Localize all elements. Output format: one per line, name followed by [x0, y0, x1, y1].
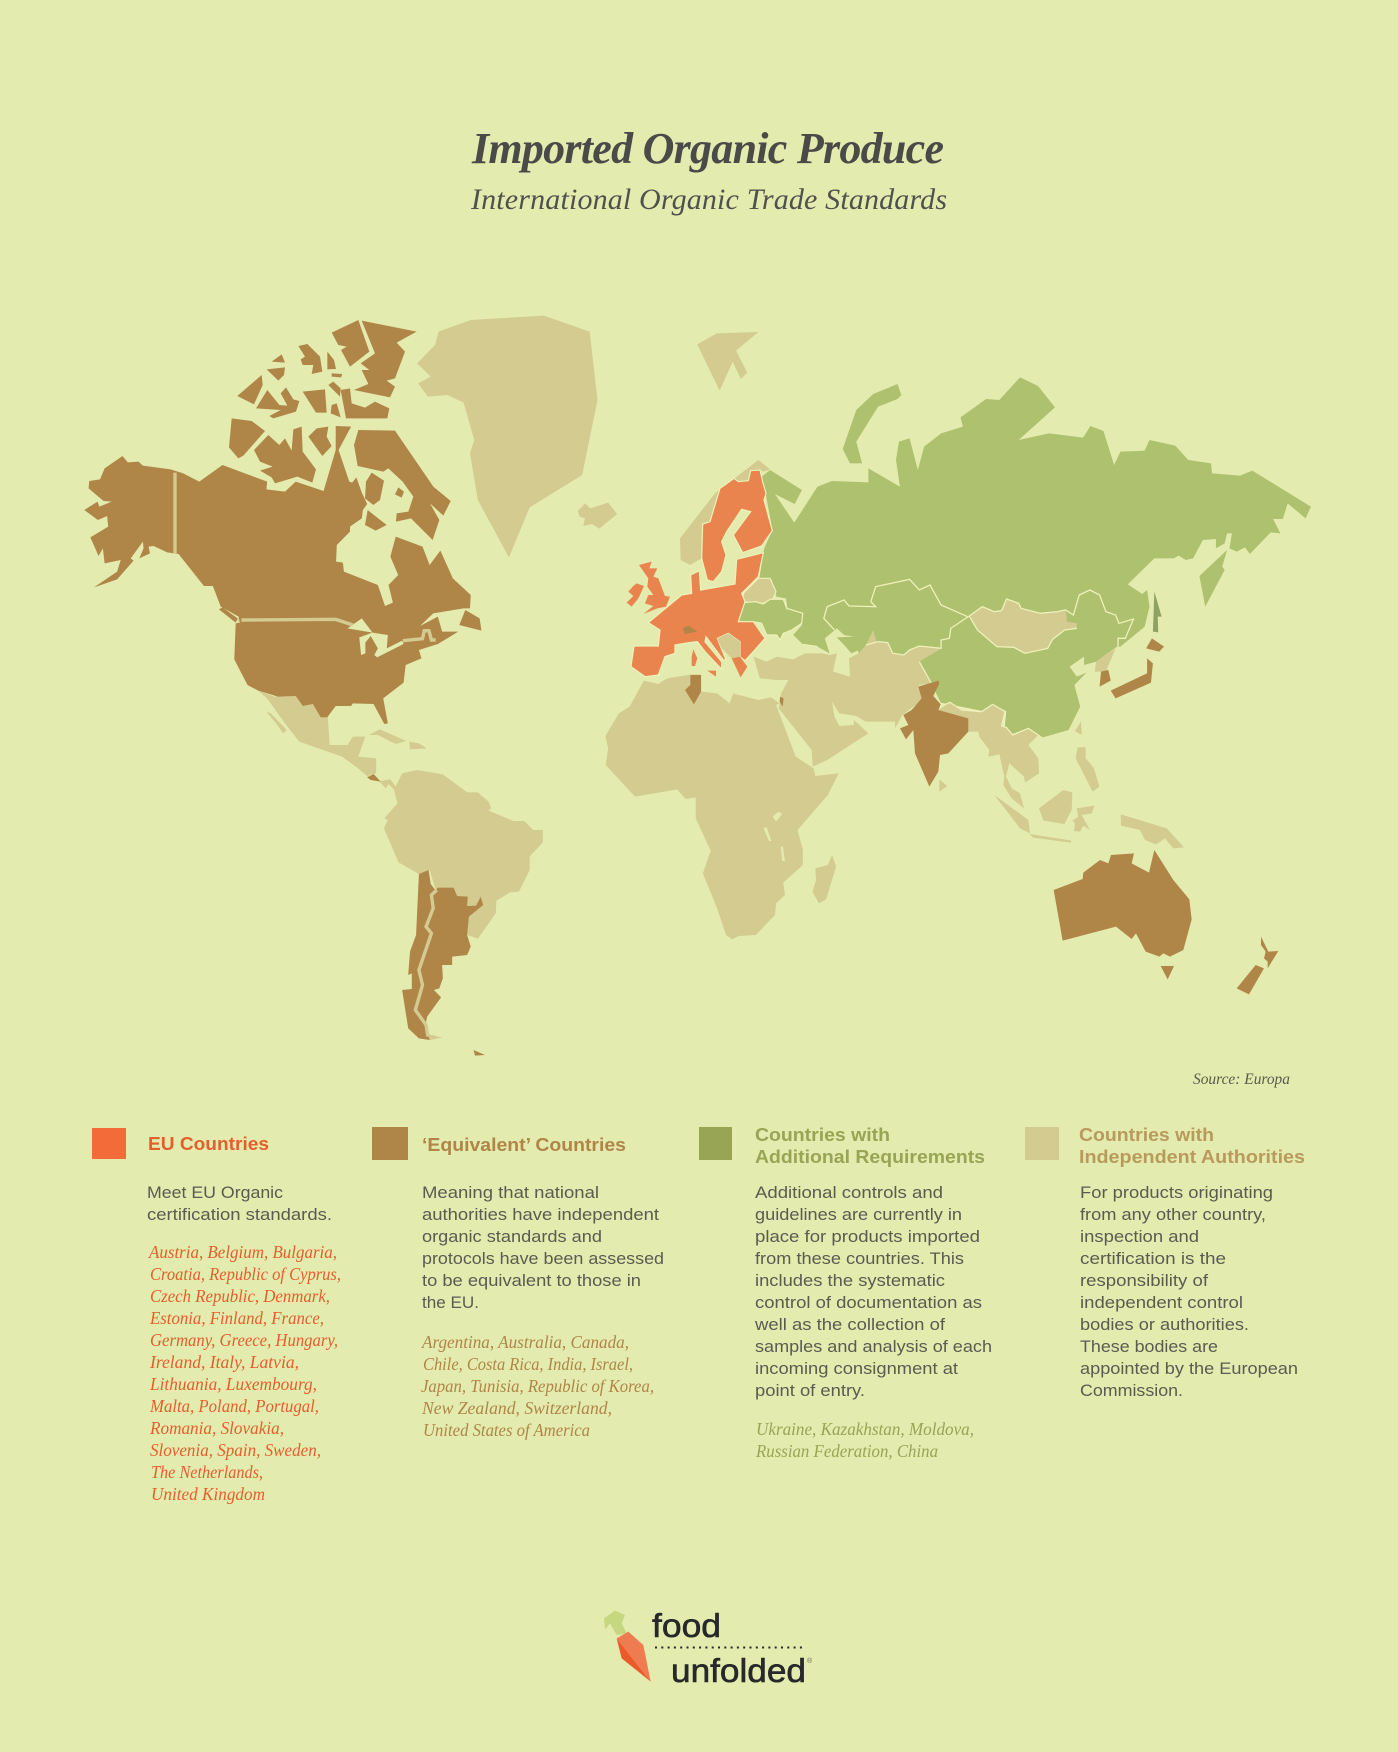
country list: additional requirements [755, 1419, 974, 1461]
heading: additional requirements [755, 1125, 985, 1167]
swatch: orange [92, 1128, 126, 1159]
Japan [1100, 638, 1164, 698]
country list: equivalent: Japan, Tunisia, Republic of Korea, [421, 1376, 654, 1396]
wordmark: food: food [652, 1607, 721, 1644]
description: equivalent [422, 1183, 664, 1312]
swatch: tan [1025, 1127, 1059, 1160]
description: additional requirements: samples and analysis of each [755, 1337, 992, 1356]
description: independent authorities: responsibility of [1080, 1271, 1208, 1290]
Madagascar [812, 855, 836, 903]
country list: additional requirements: Russian Federation, China [755, 1441, 938, 1461]
USA and Canada [84, 426, 471, 724]
Indonesia, Philippines, Sri Lanka, PNG [939, 722, 1184, 848]
description: additional requirements [754, 1183, 992, 1400]
region: Asia Pacific [900, 681, 1278, 994]
Tunisia [685, 675, 701, 704]
country list: equivalent: Chile, Costa Rica, India, Israel, [423, 1354, 633, 1374]
country list: EU [148, 1242, 341, 1504]
Balkans [717, 633, 740, 658]
Chile and Argentina [402, 870, 483, 1040]
Australia and New Zealand [1054, 850, 1278, 994]
country list: EU: Malta, Poland, Portugal, [149, 1396, 319, 1416]
country outlines [803, 579, 1134, 737]
borders [175, 473, 436, 641]
heading: EU countries: EU Countries [148, 1134, 269, 1154]
Mexico [258, 691, 376, 775]
Svalbard [697, 332, 758, 391]
description: independent authorities: For products originating [1080, 1183, 1273, 1202]
Greece and islands [692, 649, 747, 677]
country list: EU: Slovenia, Spain, Sweden, [150, 1440, 321, 1460]
description: equivalent: organic standards and [422, 1227, 602, 1246]
region: Africa and Latin America [360, 675, 839, 1056]
description: additional requirements: place for products imported [755, 1227, 980, 1246]
description: additional requirements: control of documentation as [755, 1293, 982, 1312]
Korea north [1095, 648, 1116, 672]
heading: independent authorities: Countries with [1079, 1125, 1214, 1145]
country list: EU: Austria, Belgium, Bulgaria, [148, 1242, 337, 1262]
legend: independent authorities [1025, 1125, 1305, 1400]
icon: carrot [604, 1611, 651, 1682]
dotted rule [655, 1646, 806, 1648]
heading: independent authorities: Independent Authorities [1079, 1147, 1305, 1167]
wordmark: unfolded: unfolded [671, 1652, 806, 1689]
country list: EU: Lithuania, Luxembourg, [149, 1374, 317, 1394]
title [470, 124, 947, 216]
description: additional requirements: Additional controls and [755, 1183, 943, 1202]
Iceland [578, 503, 617, 529]
description: equivalent: Meaning that national [422, 1183, 599, 1202]
description: independent authorities: These bodies are [1080, 1337, 1218, 1356]
region: North America [84, 316, 617, 775]
description: equivalent: the EU. [422, 1293, 479, 1312]
India [900, 681, 968, 787]
description: equivalent: protocols have been assessed [422, 1249, 664, 1268]
subtitle: International Organic Trade Standards [470, 183, 947, 216]
South America [384, 770, 543, 939]
Great Lakes [347, 618, 404, 657]
Sakhalin [1153, 592, 1162, 632]
description: independent authorities: bodies or authorities. [1080, 1315, 1249, 1334]
legend: equivalent countries [372, 1127, 664, 1440]
description: independent authorities: certification is the [1080, 1249, 1226, 1268]
country list: EU: Germany, Greece, Hungary, [150, 1330, 338, 1350]
heading: additional requirements: Additional Requirements [755, 1147, 985, 1167]
swatch: green [699, 1127, 732, 1160]
country list: EU: United Kingdom [151, 1484, 265, 1504]
region: Europe [627, 460, 803, 677]
country list: equivalent: United States of America [423, 1420, 590, 1440]
description: EU: certification standards. [147, 1205, 332, 1224]
description: additional requirements: includes the systematic [755, 1271, 946, 1290]
Caribbean and Central America [360, 729, 427, 789]
Turkmenistan coast [837, 637, 859, 653]
country list: EU: Estonia, Finland, France, [149, 1308, 324, 1328]
Southeast Asia [938, 702, 1039, 808]
description: equivalent: to be equivalent to those in [422, 1271, 641, 1290]
description: additional requirements: guidelines are currently in [755, 1205, 962, 1224]
country list: EU: Ireland, Italy, Latvia, [149, 1352, 299, 1372]
world map [84, 316, 1311, 1056]
description: additional requirements: incoming consignment at [755, 1359, 958, 1378]
registered mark: ® [807, 1657, 813, 1665]
country list: equivalent: New Zealand, Switzerland, [421, 1398, 612, 1418]
Novaya Zemlya [843, 384, 901, 463]
description: additional requirements: point of entry. [755, 1381, 865, 1400]
Norway [680, 460, 770, 565]
Russia, Kazakhstan and China [759, 377, 1311, 737]
heading: additional requirements: Countries with [755, 1125, 890, 1145]
region: Eurasia [697, 332, 1311, 767]
description: independent authorities: inspection and [1080, 1227, 1199, 1246]
description: independent authorities: Commission. [1080, 1381, 1183, 1400]
heading: equivalent countries: ‘Equivalent’ Countries [422, 1135, 626, 1155]
logo: food unfolded [604, 1607, 813, 1689]
country list: EU: Romania, Slovakia, [149, 1418, 284, 1438]
African lakes [764, 812, 785, 861]
Scandinavia EU [702, 470, 772, 582]
description: independent authorities: from any other country, [1080, 1205, 1266, 1224]
EU mainland [631, 553, 765, 677]
Israel [780, 697, 784, 707]
description: EU [147, 1183, 332, 1224]
country list: additional requirements: Ukraine, Kazakhstan, Moldova, [756, 1419, 974, 1439]
description: additional requirements: well as the collection of [754, 1315, 945, 1334]
Ukraine and Moldova [738, 599, 803, 640]
legend: EU countries [92, 1128, 341, 1504]
heading: independent authorities [1079, 1125, 1305, 1167]
swatch: brown [372, 1127, 408, 1160]
country list: EU: Croatia, Republic of Cyprus, [150, 1264, 341, 1284]
country list: equivalent [421, 1332, 654, 1440]
Newfoundland and Vancouver Island [219, 607, 481, 631]
Kamchatka-side island [1199, 550, 1227, 607]
country list: equivalent: Argentina, Australia, Canada, [421, 1332, 629, 1352]
Switzerland [683, 626, 697, 634]
Falkland Islands [474, 1050, 485, 1056]
description: additional requirements: from these countries. This [755, 1249, 964, 1268]
source note: Source: Europa [1193, 1071, 1290, 1088]
Middle East and Central Asia [754, 642, 941, 767]
Africa [605, 675, 839, 939]
description: independent authorities: appointed by the European [1080, 1359, 1298, 1378]
description: equivalent: authorities have independent [422, 1205, 659, 1224]
Greenland [417, 316, 597, 557]
description: independent authorities: independent control [1080, 1293, 1243, 1312]
country list: EU: Czech Republic, Denmark, [150, 1286, 330, 1306]
country list: EU: The Netherlands, [151, 1462, 263, 1482]
legend: additional requirements [699, 1125, 992, 1461]
region: Canadian Arctic islands [229, 320, 451, 540]
title: Imported Organic Produce [471, 124, 944, 173]
Mongolia [969, 599, 1077, 653]
description: EU: Meet EU Organic [147, 1183, 284, 1202]
Belarus [743, 578, 776, 603]
description: independent authorities [1080, 1183, 1298, 1400]
UK and Ireland [627, 562, 670, 614]
Costa Rica [367, 774, 381, 782]
